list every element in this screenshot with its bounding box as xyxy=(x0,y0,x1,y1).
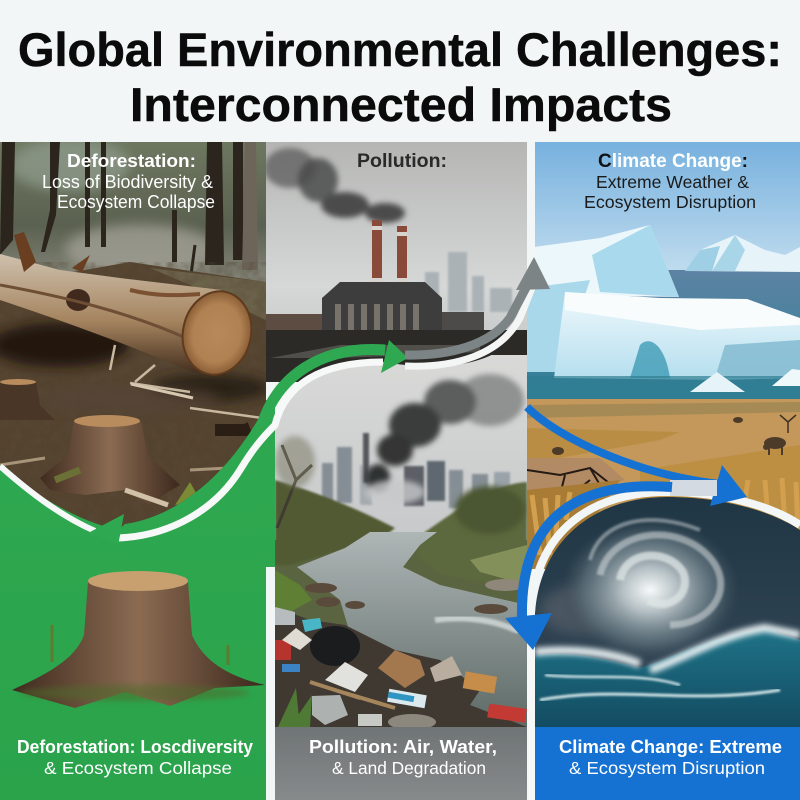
smoke plume xyxy=(264,148,405,223)
small stump xyxy=(0,379,55,420)
arrow: storm curling down xyxy=(505,480,717,650)
panel: green deforestation backdrop xyxy=(0,400,275,800)
icon: tree stump xyxy=(12,571,265,708)
rocks xyxy=(305,579,525,614)
deforestation label: Loss of Biodiversity & xyxy=(42,172,213,192)
left white border of green panel xyxy=(0,466,95,531)
litter shore xyxy=(275,607,527,727)
panel: arctic photo xyxy=(527,142,800,402)
panel: climate caption xyxy=(535,727,800,800)
forest trunks xyxy=(0,142,258,282)
black smoke xyxy=(366,374,524,492)
panel: drought savanna photo xyxy=(527,399,800,570)
arrow: deforestation to pollution xyxy=(90,340,408,546)
sea xyxy=(527,270,800,402)
large stump xyxy=(40,415,180,505)
left grass xyxy=(275,570,312,612)
climate change label: Extreme Weather & xyxy=(596,172,749,192)
panel: climate caption: & Ecosystem Disruption xyxy=(569,758,765,778)
grass plant xyxy=(278,688,312,727)
cracked earth xyxy=(527,466,608,486)
fallen log xyxy=(0,232,259,381)
panel: deforestation caption and stump xyxy=(12,571,265,778)
front iceberg xyxy=(554,292,800,380)
riverbanks xyxy=(275,480,395,565)
climate change label: Ecosystem Disruption xyxy=(584,192,756,212)
debris sticks xyxy=(110,345,262,418)
deforestation label: Ecosystem Collapse xyxy=(57,192,215,212)
river water xyxy=(297,532,527,727)
large iceberg xyxy=(535,225,679,297)
panel: storm photo xyxy=(527,495,800,730)
panel: pollution caption: & Land Degradation xyxy=(332,758,486,778)
tree xyxy=(277,445,312,528)
panel: pollution caption: Pollution: Air, Water, xyxy=(309,736,497,757)
title: Interconnected Impacts xyxy=(130,79,672,132)
hurricane swirl xyxy=(570,524,732,654)
animals xyxy=(552,417,786,455)
arrow: pollution to climate xyxy=(405,257,550,366)
log cut end xyxy=(182,290,252,376)
panel: deforestation caption and stump: & Ecosystem Collapse xyxy=(44,758,232,778)
white strip beside climate column xyxy=(527,610,535,800)
panel: deforestation photo xyxy=(0,139,270,530)
climate change label: Climate Change: xyxy=(598,151,748,172)
title xyxy=(18,24,782,132)
panel: deforestation caption and stump: Deforestation: Loscdiversity xyxy=(17,736,254,757)
storm white border xyxy=(531,492,800,650)
factory building xyxy=(322,282,442,334)
litter xyxy=(275,607,527,730)
factory chimneys xyxy=(372,220,407,282)
title: Global Environmental Challenges: xyxy=(18,24,782,77)
forest ground xyxy=(0,262,266,530)
skyline xyxy=(425,252,512,312)
deforestation label: Deforestation: xyxy=(67,150,196,171)
arrow: climate to storm xyxy=(527,407,747,506)
climate change label xyxy=(584,151,756,212)
panel: river photo xyxy=(275,355,527,730)
panel: climate caption: Climate Change: Extreme xyxy=(559,736,782,757)
skyline xyxy=(322,433,510,508)
panel: pollution caption xyxy=(275,727,527,800)
panel: factory photo xyxy=(264,142,527,390)
wheat xyxy=(527,480,620,570)
deforestation label xyxy=(42,150,215,212)
pollution label: Pollution: xyxy=(357,151,447,172)
wave xyxy=(535,628,800,727)
floating ice xyxy=(690,372,745,392)
distant iceberg xyxy=(685,235,800,272)
